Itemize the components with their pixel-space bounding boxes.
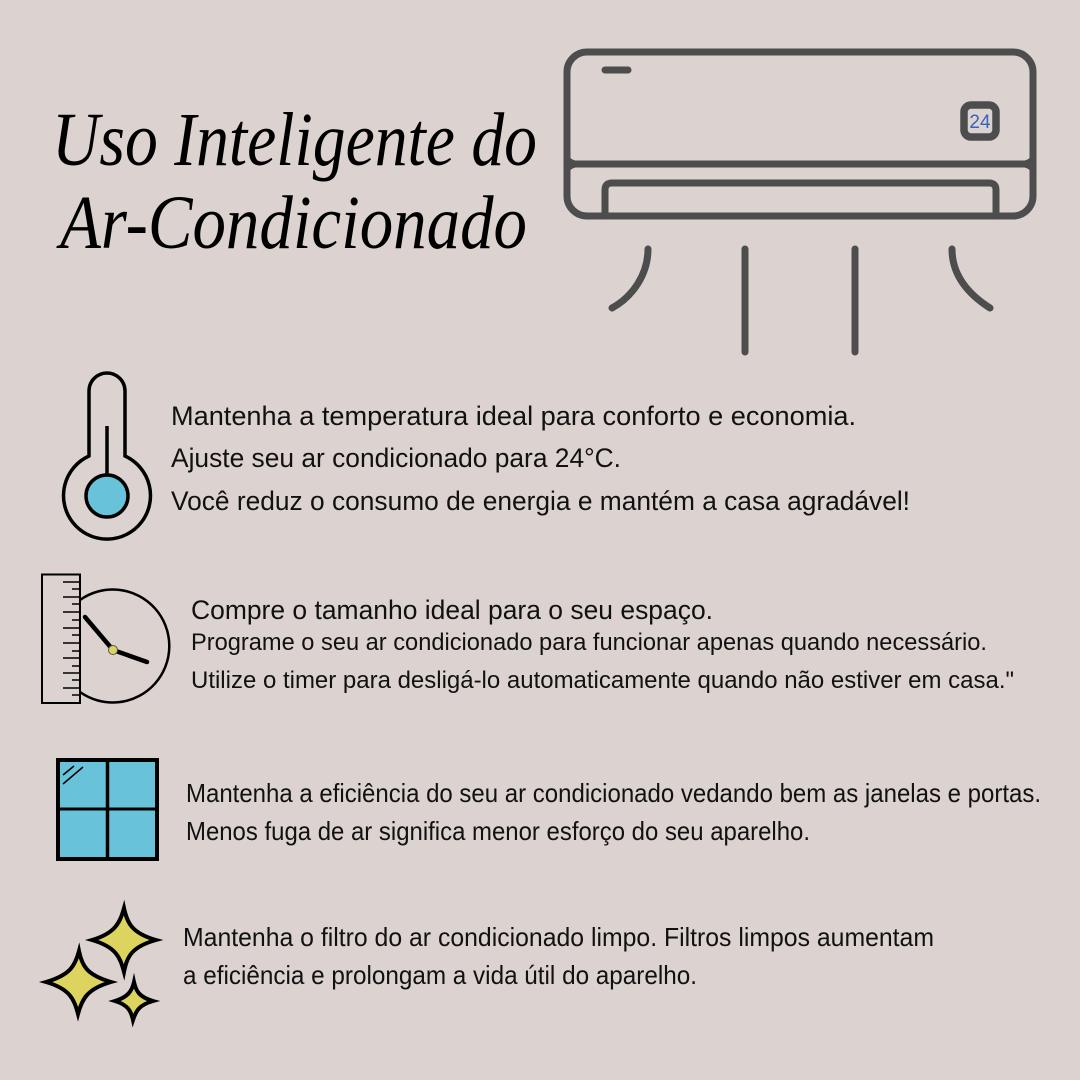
- text block: size and timer: Programe o seu ar condicionado para funcionar apenas quando necessário.: [191, 629, 987, 656]
- title: Uso Inteligente do: [52, 98, 537, 182]
- text block: sealing: [186, 778, 1041, 846]
- text block: temperature: [171, 401, 910, 516]
- text block: size and timer: Compre o tamanho ideal para o seu espaço.: [191, 595, 713, 625]
- title: [52, 98, 537, 265]
- icon: thermometer: [64, 373, 151, 539]
- text block: size and timer: [191, 595, 1014, 694]
- text block: filter: Mantenha o filtro do ar condicionado limpo. Filtros limpos aumentam: [183, 922, 934, 952]
- text block: filter: [183, 922, 934, 990]
- icon: air conditioner: [567, 52, 1033, 352]
- icon: sparkles: [46, 908, 156, 1020]
- text block: temperature: Você reduz o consumo de energia e mantém a casa agradável!: [171, 486, 910, 516]
- text block: sealing: Menos fuga de ar significa menor esforço do seu aparelho.: [186, 816, 810, 846]
- icon: window: [58, 760, 157, 859]
- icon: air conditioner: 24: [969, 112, 991, 133]
- text block: temperature: Ajuste seu ar condicionado para 24°C.: [171, 443, 621, 473]
- text block: filter: a eficiência e prolongam a vida útil do aparelho.: [183, 960, 697, 990]
- text block: temperature: Mantenha a temperatura ideal para conforto e economia.: [171, 401, 856, 431]
- title: Ar-Condicionado: [56, 181, 527, 265]
- icon: ruler and clock: [42, 574, 169, 703]
- text block: size and timer: Utilize o timer para desligá-lo automaticamente quando não estiver em casa.": [191, 667, 1014, 694]
